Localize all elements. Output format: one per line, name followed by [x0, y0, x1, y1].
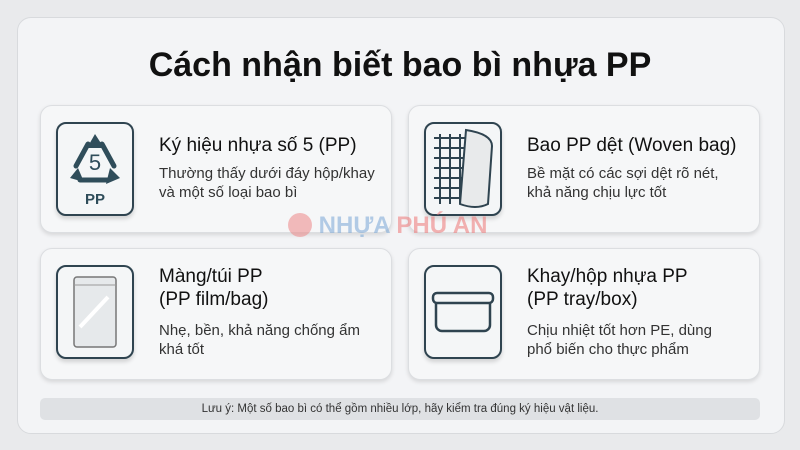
heading: (PP film/bag) [159, 289, 268, 310]
description [527, 165, 719, 201]
icon: recycle 5 PP: PP [85, 191, 105, 208]
description: phổ biến cho thực phẩm [527, 341, 689, 358]
panel: resin code 5 [40, 105, 392, 233]
icon: woven bag [424, 122, 502, 216]
description: Thường thấy dưới đáy hộp/khay [159, 165, 375, 182]
panel: woven bag [408, 105, 760, 233]
panel: PP film [40, 248, 392, 380]
heading: Khay/hộp nhựa PP [527, 266, 688, 287]
description: Chịu nhiệt tốt hơn PE, dùng [527, 322, 712, 339]
heading: Màng/túi PP [159, 266, 262, 287]
watermark logo: NHỰA PHÚ AN [319, 212, 487, 239]
description: Bề mặt có các sợi dệt rõ nét, [527, 165, 719, 182]
panel: PP tray [408, 248, 760, 380]
description [527, 322, 712, 358]
heading: (PP tray/box) [527, 289, 638, 310]
icon: tray box [424, 265, 502, 359]
note bar [40, 398, 760, 420]
icon: recycle 5 PP: 5 [89, 150, 101, 175]
description: và một số loại bao bì [159, 184, 297, 201]
icon: film bag [56, 265, 134, 359]
description: Nhẹ, bền, khả năng chống ẩm [159, 322, 360, 339]
description [159, 165, 375, 201]
heading: Bao PP dệt (Woven bag) [527, 135, 736, 156]
title: Cách nhận biết bao bì nhựa PP [149, 46, 651, 84]
heading [159, 266, 268, 310]
icon: recycle 5 PP [56, 122, 134, 216]
heading: Ký hiệu nhựa số 5 (PP) [159, 135, 357, 156]
description: khá tốt [159, 341, 204, 358]
description: khả năng chịu lực tốt [527, 184, 666, 201]
heading [527, 266, 688, 310]
note bar: Lưu ý: Một số bao bì có thể gồm nhiều lớp, hãy kiểm tra đúng ký hiệu vật liệu. [202, 403, 598, 415]
description [159, 322, 360, 358]
